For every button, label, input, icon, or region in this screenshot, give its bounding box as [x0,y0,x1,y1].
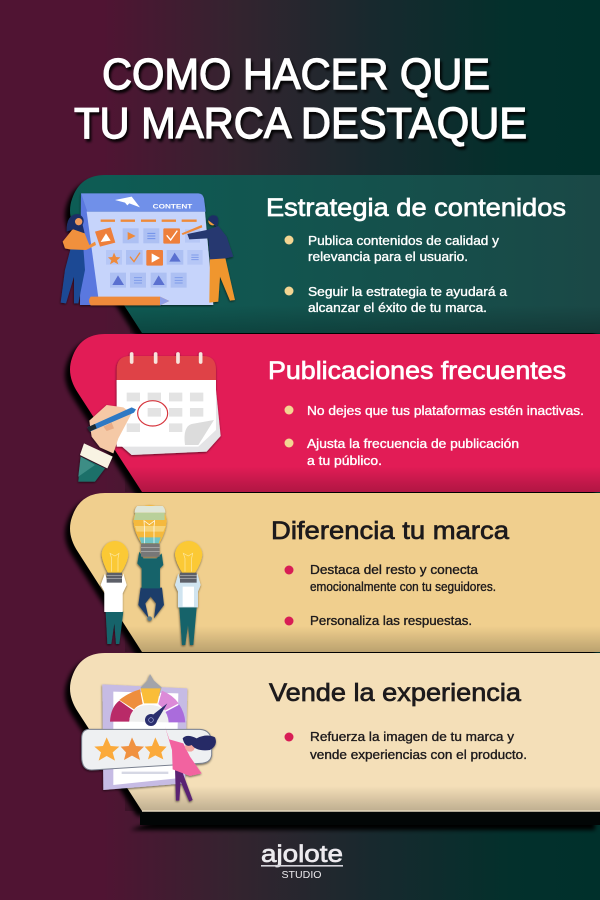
bullet list [284,730,527,762]
bullet list: alcanzar el éxito de tu marca. [308,301,487,315]
middle person [138,588,164,618]
bullet list [284,234,507,315]
icon: people holding light bulbs [101,505,202,645]
bullet list [284,563,496,628]
bullet list: a tu público. [307,454,382,468]
heading: Vende la experiencia [269,679,521,707]
bullet list: No dejes que tus plataformas estén inactivas. [307,404,584,418]
left person [106,612,123,644]
title: COMO HACER QUE [102,50,490,99]
bullet list: Ajusta la frecuencia de publicación [307,437,519,451]
man [209,257,235,303]
bullet list: emocionalmente con tu seguidores. [310,580,496,594]
logo: ajolote studio: STUDIO [282,869,322,881]
right person [179,607,197,645]
bullet list: Seguir la estrategia te ayudará a [308,285,507,299]
title [74,50,527,148]
logo: ajolote studio: ajolote [261,841,343,868]
icon: content calendar [61,193,235,305]
title: TU MARCA DESTAQUE [74,99,527,148]
heading: Publicaciones frecuentes [268,357,566,385]
woman [175,768,193,802]
bullet list: Refuerza la imagen de tu marca y [310,730,515,744]
bullet list: Destaca del resto y conecta [310,563,478,577]
icon: calendar with hand [78,354,221,482]
panel: estrategia de contenidos [61,175,600,338]
panel: publicaciones frecuentes [65,334,600,497]
bullet list: Publica contenidos de calidad y [308,234,500,248]
bullet list: Personaliza las respuestas. [310,614,472,628]
icon: rating gauge with stars [82,674,216,802]
bullet list [284,404,584,468]
bullet list: vende experiencias con el producto. [310,748,527,762]
panel: diferencia tu marca [65,493,600,657]
woman [61,247,85,303]
icon: content calendar: CONTENT [153,204,192,211]
heading: Estrategia de contenidos [266,194,566,222]
logo: ajolote studio [261,841,343,881]
panel: vende la experiencia [65,653,600,830]
bullet list: relevancia para el usuario. [308,250,468,264]
heading: Diferencia tu marca [271,517,509,545]
